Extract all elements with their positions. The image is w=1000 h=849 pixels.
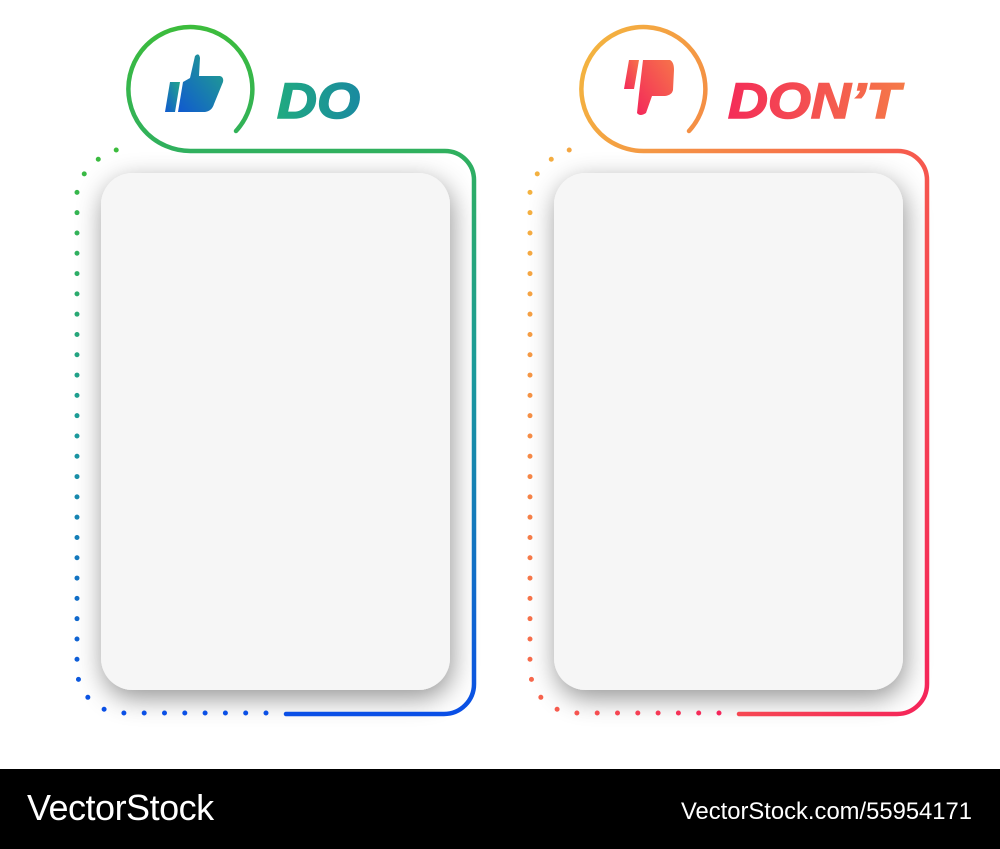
DON'T title: DON’T bbox=[728, 73, 905, 129]
icon: thumbs up bbox=[165, 54, 223, 112]
DON'T frame line bbox=[581, 27, 927, 714]
panel: DO bbox=[77, 27, 474, 714]
DON'T card bbox=[554, 173, 903, 690]
panel: DON'T bbox=[530, 27, 927, 714]
DO dotted line bbox=[77, 148, 266, 713]
DO title: DO bbox=[277, 73, 360, 129]
DO card bbox=[101, 173, 450, 690]
icon: thumbs down bbox=[624, 60, 674, 115]
footer bar bbox=[0, 769, 1000, 849]
DO frame line bbox=[128, 27, 474, 714]
footer brand: VectorStock bbox=[27, 787, 214, 828]
DON'T dotted line bbox=[530, 148, 719, 713]
footer url: VectorStock.com/55954171 bbox=[681, 798, 972, 825]
